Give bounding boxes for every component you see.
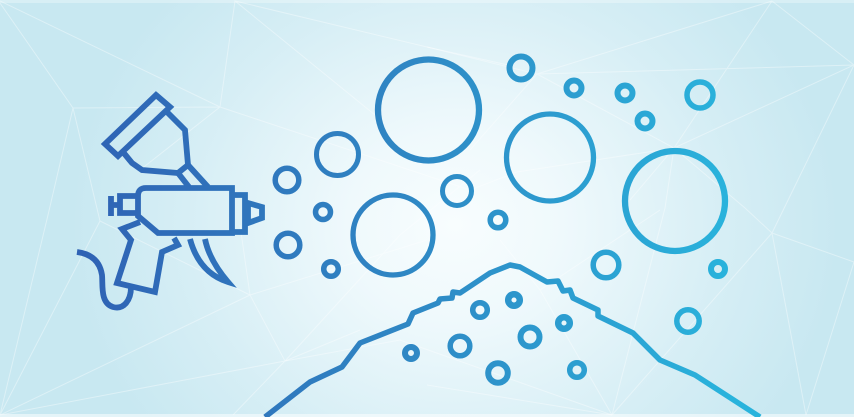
rear knob	[111, 196, 138, 216]
icon: spray gun	[77, 95, 262, 308]
nozzle	[248, 203, 262, 223]
handle	[117, 222, 178, 292]
gun body	[138, 188, 232, 233]
settled particles	[405, 294, 584, 383]
paint cup	[123, 110, 188, 173]
trigger	[190, 239, 228, 282]
paint cup lid	[105, 95, 170, 156]
front collar	[233, 195, 245, 232]
spray particles	[275, 56, 725, 332]
coating pile outline	[265, 265, 760, 417]
air hose	[77, 252, 131, 308]
cup neck	[178, 165, 208, 187]
